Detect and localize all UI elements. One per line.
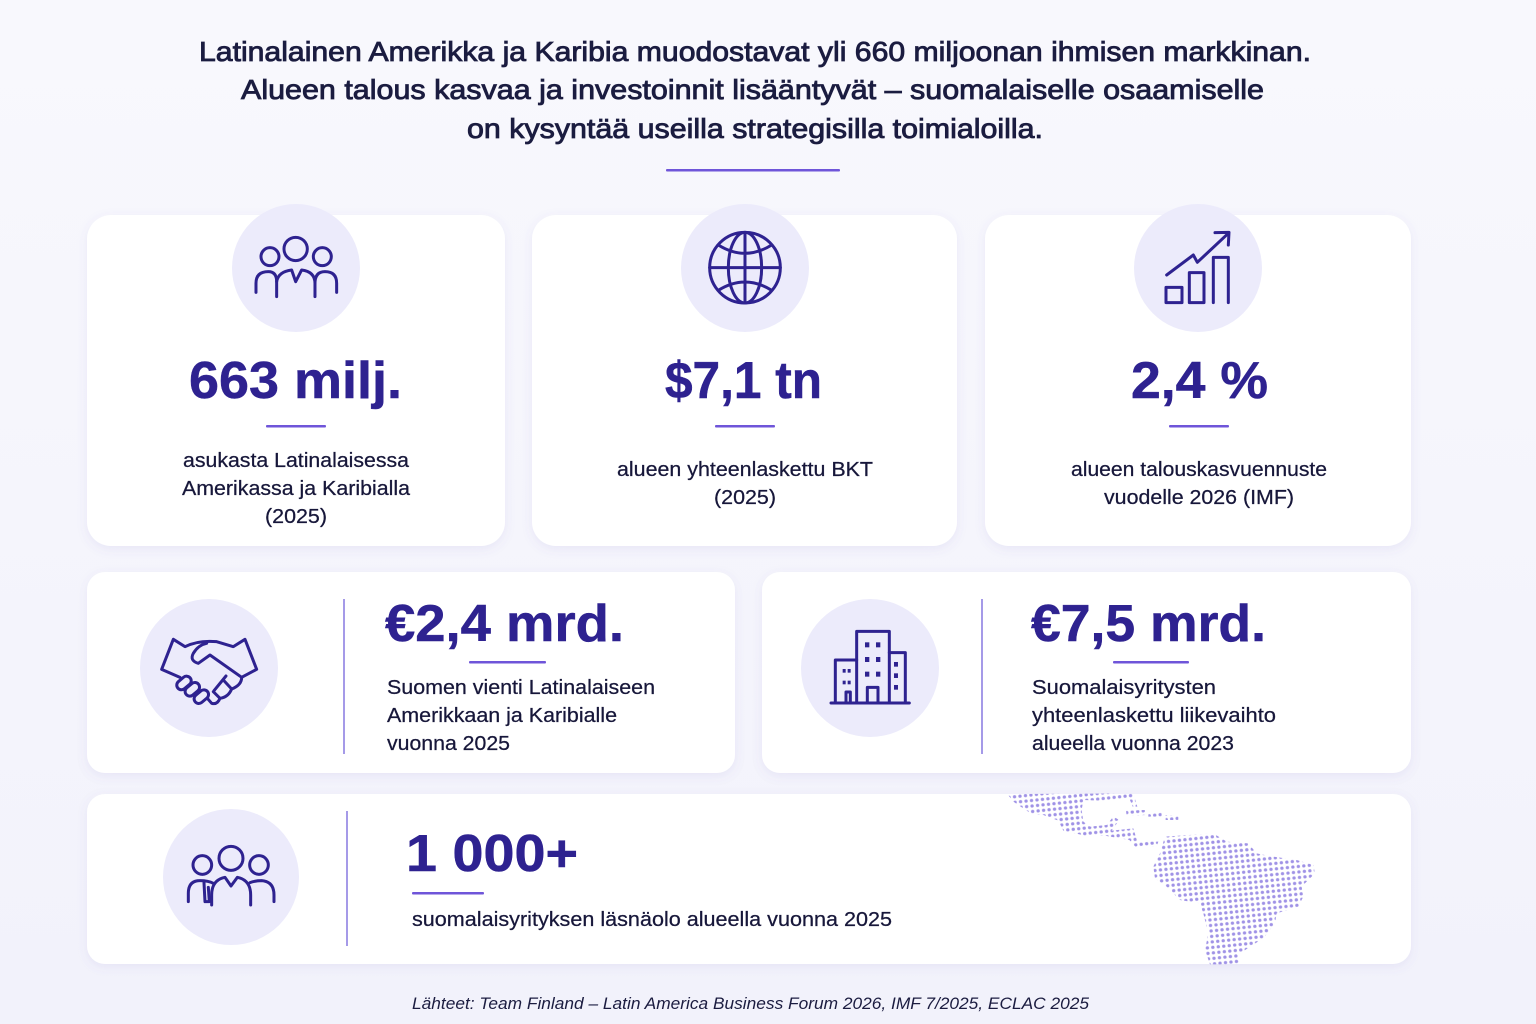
icon: globe: [681, 204, 809, 332]
panel: exports: [87, 572, 735, 773]
description: population: [182, 450, 411, 528]
map: dotted Latin America: [1007, 793, 1315, 964]
panel: GDP: [532, 204, 957, 546]
description: population: (2025): [265, 506, 327, 528]
footer: sources: Lähteet: Team Finland – Latin America Business Forum 2026, IMF 7/2025, ECLAC 2025: [412, 994, 1090, 1013]
title: Alueen talous kasvaa ja investoinnit lisääntyvät – suomalaiselle osaamiselle: [241, 74, 1264, 105]
description: growth: alueen talouskasvuennuste: [1071, 459, 1327, 481]
description: population: Amerikassa ja Karibialla: [182, 478, 411, 500]
description: GDP: alueen yhteenlaskettu BKT: [617, 459, 873, 481]
panel: population: [87, 204, 505, 546]
icon: companies group: [163, 809, 299, 945]
description: exports: vuonna 2025: [387, 733, 510, 755]
title: on kysyntää useilla strategisilla toimialoilla.: [467, 113, 1043, 144]
description: GDP: (2025): [714, 487, 776, 509]
title: [199, 36, 1311, 144]
panel: companies: [87, 793, 1411, 964]
description: exports: [387, 677, 655, 755]
statistic: €2,4 mrd.: €2,4 mrd.: [385, 595, 624, 653]
description: revenue: yhteenlaskettu liikevaihto: [1032, 705, 1276, 727]
description: exports: Amerikkaan ja Karibialle: [387, 705, 617, 727]
icon: buildings: [801, 599, 939, 737]
description: growth: vuodelle 2026 (IMF): [1104, 487, 1294, 509]
icon: growth chart: [1134, 204, 1262, 332]
icon: handshake: [140, 599, 278, 737]
statistic: $7,1 tn: $7,1 tn: [665, 352, 822, 410]
icon: people: [232, 204, 360, 332]
description: GDP: [617, 459, 873, 509]
title: Latinalainen Amerikka ja Karibia muodostavat yli 660 miljoonan ihmisen markkinan.: [199, 36, 1311, 67]
statistic: 2,4 %: 2,4 %: [1131, 352, 1268, 410]
description: revenue: [1032, 677, 1276, 755]
panel: growth: [985, 204, 1411, 546]
description: revenue: alueella vuonna 2023: [1032, 733, 1234, 755]
description: growth: [1071, 459, 1327, 509]
description: population: asukasta Latinalaisessa: [183, 450, 410, 472]
statistic: 1 000+: 1 000+: [406, 825, 578, 883]
description: companies: suomalaisyrityksen läsnäolo alueella vuonna 2025: [412, 909, 892, 931]
panel: revenue: [762, 572, 1411, 773]
statistic: €7,5 mrd.: €7,5 mrd.: [1031, 595, 1266, 653]
description: revenue: Suomalaisyritysten: [1032, 677, 1216, 699]
description: exports: Suomen vienti Latinalaiseen: [387, 677, 655, 699]
statistic: 663 milj.: 663 milj.: [189, 352, 402, 410]
